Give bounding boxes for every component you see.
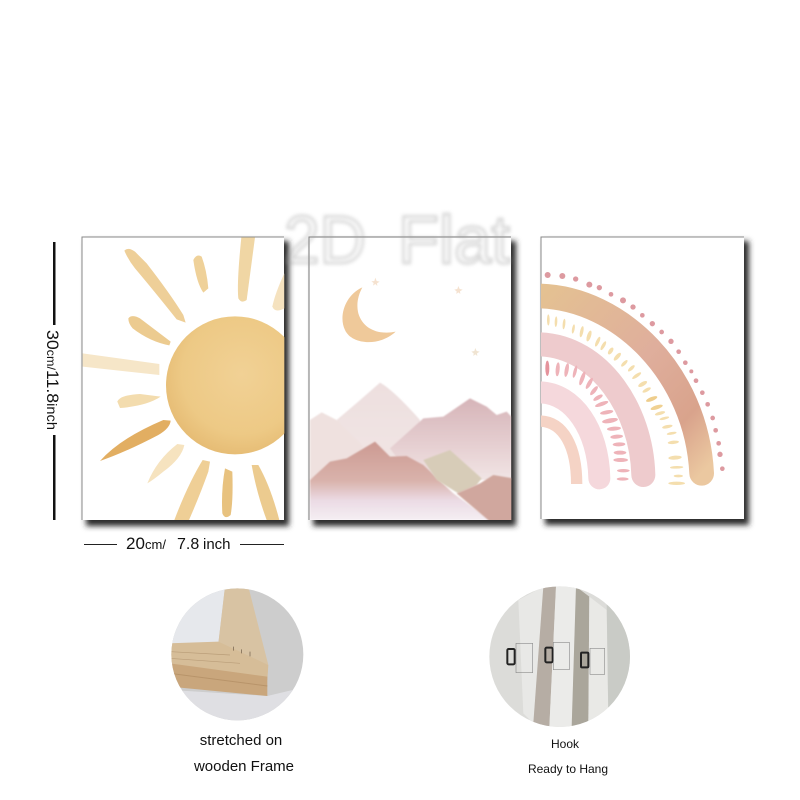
watermark: 2D Flat: Flat <box>398 202 510 278</box>
width dimension: 20cm / 7.8 inch <box>84 534 284 553</box>
caption: stretched on wooden Frame <box>193 732 294 775</box>
panel: sun print <box>82 237 304 526</box>
width dimension: 20cm / 7.8 inch: 7.8 <box>177 536 199 553</box>
moon and mountains artwork <box>310 278 513 522</box>
watermark: 2D Flat: 2D <box>284 202 366 278</box>
caption: Hook, Ready to Hang: Hook <box>551 737 580 751</box>
caption: Hook, Ready to Hang <box>528 737 608 776</box>
caption: stretched on wooden Frame: stretched on <box>200 732 282 749</box>
width dimension: 20cm / 7.8 inch: cm/ <box>145 537 166 552</box>
photo: hooks on canvas backs <box>487 583 633 730</box>
caption: Hook, Ready to Hang: Ready to Hang <box>528 762 608 776</box>
width dimension: 20cm / 7.8 inch: 20 <box>126 534 145 553</box>
pink ticks <box>545 361 630 481</box>
rainbow artwork <box>540 272 725 485</box>
caption: stretched on wooden Frame: wooden Frame <box>193 758 294 775</box>
width dimension: 20cm / 7.8 inch: inch <box>203 536 231 553</box>
yellow ticks <box>547 314 685 485</box>
hooks <box>507 648 588 667</box>
watermark: 2D Flat <box>284 202 510 278</box>
dots <box>545 272 725 471</box>
panel: rainbow print <box>540 237 749 525</box>
panel: moon and mountains print <box>309 237 516 526</box>
photo: wooden frame corner <box>170 587 307 723</box>
sun artwork <box>83 237 304 520</box>
height dimension: 30cm/11.8inch: 30 cm/ 11.8 inch <box>43 330 62 430</box>
